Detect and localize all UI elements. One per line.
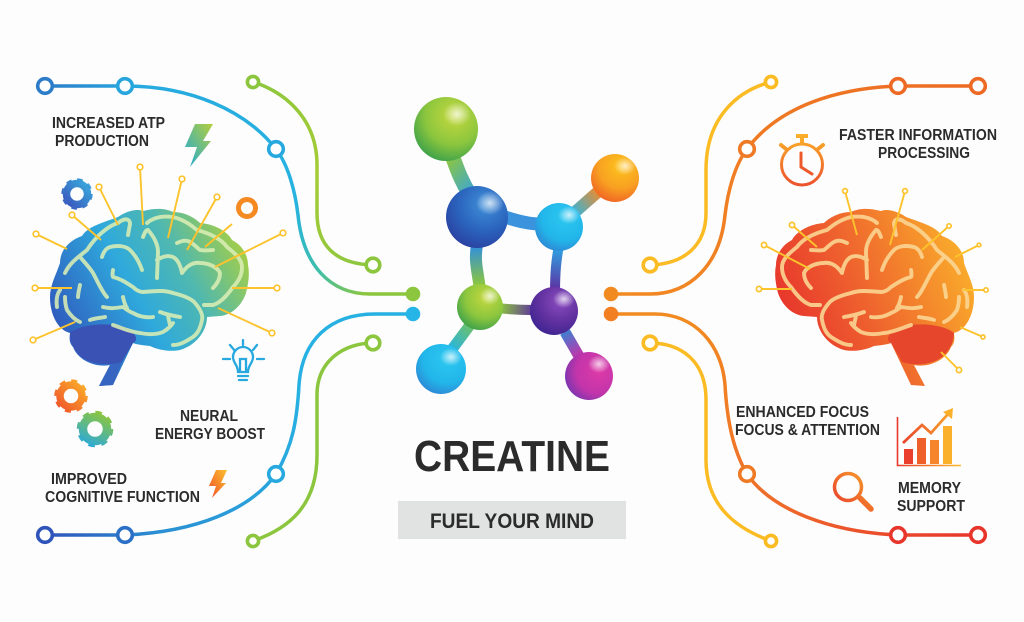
molecule bbox=[414, 97, 639, 400]
atom: large blue bbox=[446, 186, 508, 248]
left connector lines bbox=[38, 76, 420, 547]
red-orange brain with neuron lines bbox=[756, 189, 988, 386]
connector: lower yellow bbox=[650, 343, 771, 541]
label: increased ATP production: PRODUCTION bbox=[55, 133, 149, 150]
connector: upper blue to green bbox=[45, 86, 413, 294]
label: faster information processing: FASTER INFORMATION bbox=[839, 127, 997, 144]
label: memory support: MEMORY bbox=[898, 480, 961, 497]
right connector lines bbox=[604, 76, 985, 547]
atom: cyan bbox=[535, 203, 583, 251]
atom: large green bbox=[414, 97, 478, 161]
connector: lower green bbox=[253, 343, 373, 541]
icon: gear blue bbox=[63, 180, 91, 208]
label: improved cognitive function: COGNITIVE FUNCTION bbox=[45, 489, 200, 506]
icon: magnifying glass bbox=[834, 474, 871, 509]
subtitle banner: FUEL YOUR MIND bbox=[430, 509, 594, 533]
connector: upper yellow bbox=[650, 82, 771, 265]
atom: lower cyan bbox=[416, 344, 466, 394]
connector: lower blue bbox=[45, 314, 413, 535]
atom: magenta bbox=[565, 352, 613, 400]
subtitle banner bbox=[398, 501, 626, 539]
label: enhanced focus and attention: ENHANCED FOCUS bbox=[736, 404, 869, 421]
atom: orange bbox=[591, 154, 639, 202]
label: enhanced focus and attention: FOCUS & ATTENTION bbox=[735, 422, 880, 439]
connector nodes right bbox=[604, 76, 985, 547]
atom: small green bbox=[457, 284, 503, 330]
connector: lower orange red bbox=[611, 314, 978, 535]
connector nodes left bbox=[38, 76, 420, 547]
neuron lines left bbox=[30, 164, 286, 343]
connector: upper orange bbox=[611, 86, 978, 294]
icon: small lightning bolt bbox=[209, 470, 227, 498]
label: memory support bbox=[897, 480, 965, 515]
blue-green brain with neuron lines bbox=[30, 164, 286, 386]
title: CREATINE bbox=[414, 432, 610, 481]
brain shape right bbox=[775, 209, 974, 386]
label: faster information processing: PROCESSING bbox=[878, 145, 970, 162]
label: increased ATP production bbox=[52, 115, 165, 150]
atom: purple bbox=[530, 287, 578, 335]
neuron lines right bbox=[756, 189, 988, 373]
icon: gear orange bbox=[56, 381, 86, 411]
label: improved cognitive function bbox=[45, 471, 200, 506]
label: faster information processing bbox=[839, 127, 997, 162]
molecule bonds bbox=[450, 155, 600, 358]
label: enhanced focus and attention bbox=[735, 404, 880, 439]
icon: bar chart with arrow bbox=[898, 408, 961, 466]
label: neural energy boost: NEURAL bbox=[180, 408, 238, 425]
icon: stopwatch bbox=[781, 136, 823, 185]
connector: upper green bbox=[253, 82, 373, 265]
label: neural energy boost: ENERGY BOOST bbox=[155, 426, 265, 443]
label: increased ATP production: INCREASED ATP bbox=[52, 115, 165, 132]
label: improved cognitive function: IMPROVED bbox=[51, 471, 127, 488]
icon: lightning bolt green-blue bbox=[185, 124, 213, 167]
icon: orange ring bbox=[238, 200, 256, 216]
icon: gear green-blue bbox=[78, 412, 112, 446]
icon: light bulb bbox=[223, 340, 264, 380]
label: memory support: SUPPORT bbox=[897, 498, 965, 515]
brain shape left bbox=[50, 209, 249, 386]
label: neural energy boost bbox=[155, 408, 265, 443]
